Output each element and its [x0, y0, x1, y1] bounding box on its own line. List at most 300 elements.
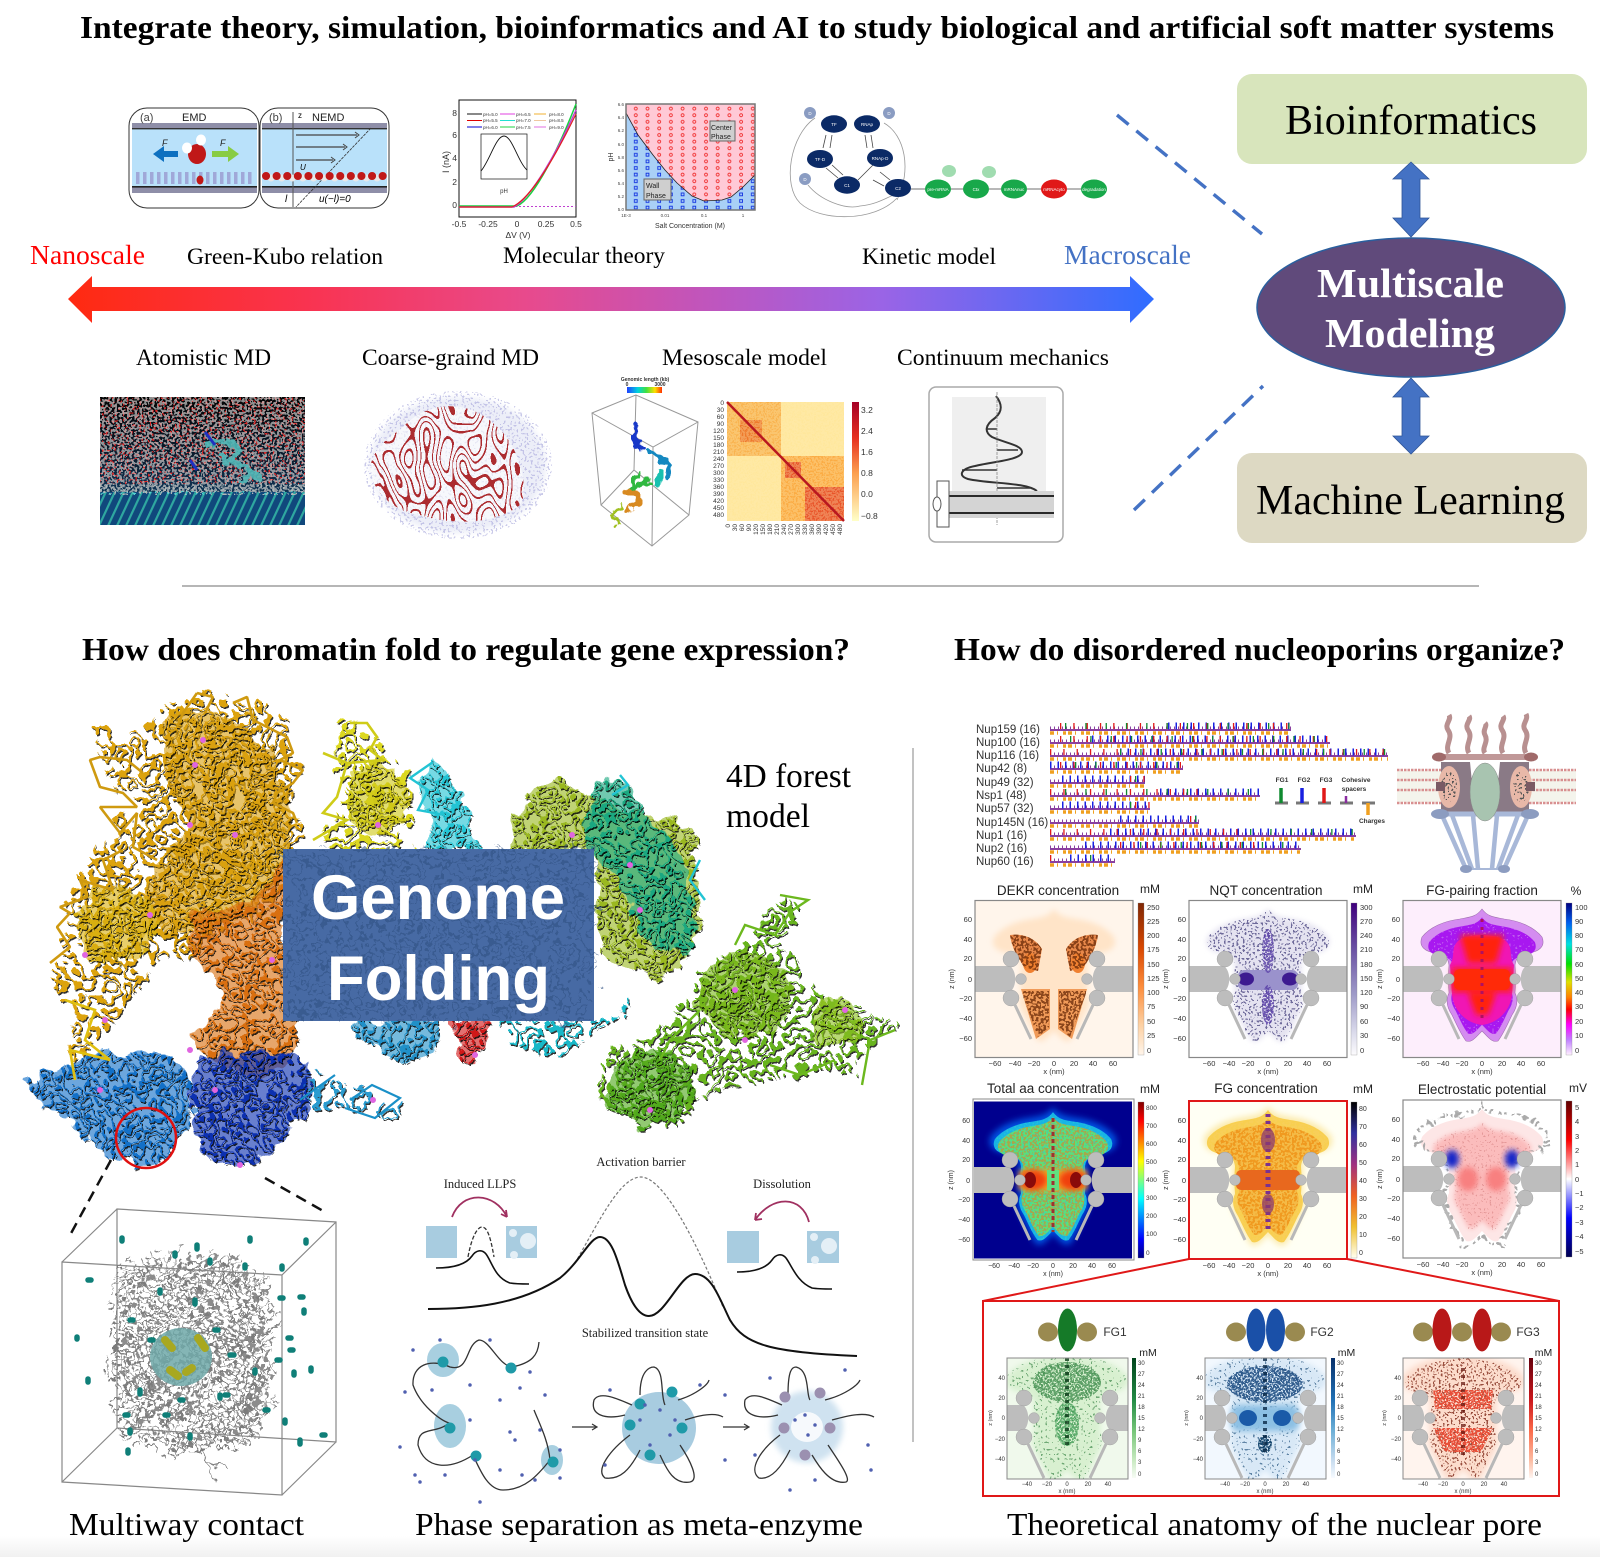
panel: FG2: 6 — [1337, 1449, 1341, 1455]
image: mesoscale polymer in box: 0 — [626, 382, 629, 388]
callout: red zoom box — [983, 1301, 1559, 1496]
chart: current versus voltage: 0 — [515, 219, 520, 229]
diagram: kinetic network: C1 — [844, 183, 850, 188]
panel: DEKR concentration: −40 — [959, 1014, 972, 1023]
panel: Electrostatic potential: −20 — [1387, 1194, 1400, 1203]
panel: FG-pairing fraction: −60 — [1417, 1059, 1429, 1068]
panel: FG concentration: 50 — [1359, 1160, 1367, 1167]
panel: FG2: FG2 — [1310, 1325, 1334, 1339]
label: Green-Kubo relation: Green-Kubo relation — [187, 244, 384, 269]
panel: FG3: 0 — [1535, 1472, 1539, 1478]
oval: Multiscale Modeling — [1257, 238, 1565, 377]
chart: energy landscape: Activation barrier — [596, 1155, 686, 1169]
panel: FG-pairing fraction: 80 — [1575, 931, 1583, 940]
chart: contact heatmap: 30 — [732, 524, 739, 531]
panel: NQT concentration: 120 — [1360, 988, 1373, 997]
chart: contact heatmap: 90 — [717, 421, 724, 428]
chart: phase diagram — [608, 102, 755, 230]
line: upper dashed connector — [1117, 115, 1262, 234]
panel: Total aa concentration: Total aa concentration — [987, 1081, 1119, 1096]
panel: Electrostatic potential: −1 — [1575, 1189, 1584, 1198]
panel: FG concentration: 20 — [1359, 1214, 1367, 1221]
panel: FG-pairing fraction: 100 — [1575, 903, 1588, 912]
panel: DEKR concentration: 60 — [964, 915, 972, 924]
panel: EMD and NEMD schematic: U — [300, 163, 306, 172]
panel: FG-pairing fraction: −20 — [1456, 1059, 1468, 1068]
chart: contact heatmap: 0.0 — [861, 489, 873, 499]
panel: Electrostatic potential: mV — [1569, 1081, 1587, 1095]
panel: FG3: 9 — [1535, 1438, 1539, 1444]
panel: FG-pairing fraction: −40 — [1437, 1059, 1449, 1068]
chart: contact heatmap: 150 — [760, 524, 767, 535]
panel: FG3 — [1382, 1308, 1552, 1495]
panel: NQT concentration: 20 — [1178, 954, 1186, 963]
panel: FG concentration: 0 — [1182, 1176, 1186, 1185]
panel: FG-pairing fraction: 40 — [1392, 935, 1400, 944]
chart: contact heatmap: 300 — [713, 470, 724, 477]
panel: Electrostatic potential: 0 — [1575, 1175, 1579, 1184]
chart: phase diagram: Wall — [646, 183, 660, 190]
panel: FG-pairing fraction: 50 — [1575, 974, 1583, 983]
panel: NQT concentration: 180 — [1360, 960, 1373, 969]
line: lower dashed connector — [1134, 386, 1263, 510]
chart: contact heatmap: 270 — [713, 463, 724, 470]
chart: contact heatmap: 0 — [720, 400, 724, 407]
panel: FG1: 27 — [1138, 1372, 1145, 1378]
panel: NQT concentration: 210 — [1360, 945, 1373, 954]
chart: contact heatmap: 330 — [713, 477, 724, 484]
panel: NQT concentration: −20 — [1242, 1059, 1254, 1068]
panel: FG concentration: 0 — [1359, 1250, 1363, 1257]
panel: Electrostatic potential: x (nm) — [1471, 1268, 1493, 1277]
chart: contact heatmap: −0.8 — [861, 511, 878, 521]
chart: current versus voltage: pH=7.0 — [516, 118, 531, 123]
panel: FG-pairing fraction: 40 — [1575, 988, 1583, 997]
arrow: scale gradient — [68, 276, 1154, 323]
panel: DEKR concentration: 20 — [964, 954, 972, 963]
chart: current versus voltage: -0.25 — [478, 219, 498, 229]
box: Machine Learning — [1237, 453, 1587, 543]
label: Mesoscale model: Mesoscale model — [662, 345, 827, 370]
panel: FG concentration: 0 — [1266, 1261, 1270, 1270]
chart: phase diagram: 5.8 — [618, 155, 624, 160]
chart: phase diagram: Phase — [646, 193, 666, 200]
panel: FG1: −40 — [1022, 1482, 1033, 1488]
panel: EMD and NEMD schematic: F — [220, 138, 226, 148]
chart: phase diagram: 5.0 — [618, 207, 624, 212]
panel: DEKR concentration: x (nm) — [1043, 1067, 1065, 1076]
panel: FG-pairing fraction: 30 — [1575, 1002, 1583, 1011]
panel: Electrostatic potential: 4 — [1575, 1117, 1579, 1126]
panel: FG1: 6 — [1138, 1449, 1142, 1455]
label: 4D forest model: 4D forest — [726, 758, 852, 795]
panel: FG1: 20 — [1085, 1482, 1092, 1488]
panel: FG concentration: FG concentration — [1214, 1081, 1318, 1096]
panel: Electrostatic potential: 20 — [1392, 1154, 1400, 1163]
panel: Total aa concentration — [948, 1081, 1160, 1278]
panel: FG2: 12 — [1337, 1427, 1344, 1433]
chart: current versus voltage: ΔV (V) — [505, 230, 531, 240]
panel: NQT concentration — [1163, 882, 1373, 1076]
panel: FG2: 20 — [1196, 1396, 1204, 1402]
panel: NQT concentration: 0 — [1182, 975, 1186, 984]
panel: FG concentration: 30 — [1359, 1196, 1367, 1203]
panel: Total aa concentration: 500 — [1146, 1159, 1157, 1166]
panel: FG1: 40 — [1105, 1482, 1112, 1488]
panel: Electrostatic potential: −5 — [1575, 1247, 1584, 1256]
chart: contact heatmap: 3.2 — [861, 405, 873, 415]
panel: Electrostatic potential: −60 — [1387, 1234, 1400, 1243]
panel: FG concentration: 60 — [1359, 1142, 1367, 1149]
panel: Total aa concentration: 100 — [1146, 1231, 1157, 1238]
chart: contact heatmap: 390 — [713, 491, 724, 498]
panel: FG-pairing fraction: −60 — [1387, 1034, 1400, 1043]
panel: FG3: FG3 — [1516, 1325, 1540, 1339]
image: continuum beam — [929, 387, 1063, 542]
panel: FG concentration: 80 — [1359, 1106, 1367, 1113]
panel: FG concentration: mM — [1353, 1082, 1373, 1096]
chart: phase diagram: 1E-3 — [621, 213, 631, 218]
chart: energy landscape: Stabilized transition state — [582, 1326, 709, 1340]
panel: Total aa concentration: mM — [1140, 1082, 1160, 1096]
panel: NQT concentration: −40 — [1173, 1014, 1186, 1023]
panel: Electrostatic potential: Electrostatic potential — [1418, 1082, 1546, 1097]
panel: FG3: z (nm) — [1382, 1410, 1388, 1426]
panel: NQT concentration: −40 — [1223, 1059, 1235, 1068]
panel: FG concentration: z (nm) — [1163, 1170, 1170, 1190]
label: Continuum mechanics: Continuum mechanics — [897, 345, 1109, 370]
panel: FG1: 12 — [1138, 1427, 1145, 1433]
panel: FG2: 20 — [1283, 1482, 1290, 1488]
chart: contact heatmap: 120 — [753, 524, 760, 535]
panel: FG-pairing fraction: 0 — [1480, 1059, 1484, 1068]
panel: FG concentration: 20 — [1178, 1155, 1186, 1164]
panel: FG-pairing fraction: z (nm) — [1377, 969, 1384, 989]
chart: current versus voltage: pH=8.0 — [549, 112, 564, 117]
panel: FG concentration: 70 — [1359, 1124, 1367, 1131]
panel: FG-pairing fraction: 90 — [1575, 917, 1583, 926]
chart: nucleoporin sequences: Cohesive — [1342, 777, 1371, 784]
panel: FG1: 0 — [1065, 1482, 1069, 1488]
panel: DEKR concentration: 50 — [1147, 1017, 1155, 1026]
chart: current versus voltage: pH=5.0 — [483, 112, 498, 117]
panel: FG-pairing fraction: % — [1571, 884, 1582, 898]
chart: current versus voltage: pH=7.5 — [516, 125, 531, 130]
panel: Total aa concentration: x (nm) — [1043, 1271, 1063, 1278]
diagram: kinetic network: D — [887, 111, 891, 116]
chart: phase diagram: 5.6 — [618, 168, 624, 173]
panel: EMD and NEMD schematic: (b) — [269, 112, 282, 124]
panel: NQT concentration: 0 — [1266, 1059, 1270, 1068]
chart: contact heatmap: 330 — [802, 524, 809, 535]
panel: FG2: −40 — [1193, 1457, 1204, 1463]
panel: FG3: −40 — [1391, 1457, 1402, 1463]
panel: FG concentration: 10 — [1359, 1232, 1367, 1239]
panel: FG-pairing fraction: x (nm) — [1471, 1067, 1493, 1076]
chart: contact heatmap: 480 — [713, 512, 724, 519]
title: Integrate theory, simulation, bioinformatics and AI to study biological and artificial soft matter systems — [80, 10, 1554, 45]
chart: contact heatmap: 240 — [713, 456, 724, 463]
panel: Total aa concentration: −20 — [1027, 1263, 1039, 1270]
panel: DEKR concentration: z (nm) — [949, 969, 956, 989]
panel: NQT concentration: mM — [1353, 882, 1373, 896]
chart: nucleoporin sequences: Nup1 (16) — [976, 830, 1027, 842]
panel: FG3: 30 — [1535, 1361, 1542, 1367]
panel: DEKR concentration: mM — [1140, 882, 1160, 896]
chart: current versus voltage: pH=6.5 — [516, 112, 531, 117]
panel: FG3: 20 — [1481, 1482, 1488, 1488]
diagram: kinetic network: mRNAcyto — [1043, 187, 1065, 192]
panel: DEKR concentration: 0 — [1147, 1046, 1151, 1055]
chart: nucleoporin sequences: Nup49 (32) — [976, 777, 1034, 789]
panel: FG-pairing fraction: −20 — [1387, 994, 1400, 1003]
chart: current versus voltage — [441, 100, 582, 240]
panel: DEKR concentration: −20 — [959, 994, 972, 1003]
panel: FG2: 27 — [1337, 1372, 1344, 1378]
panel: FG1: 18 — [1138, 1405, 1145, 1411]
chart: phase diagram: Phase — [711, 134, 731, 141]
diagram: kinetic network: TF·D — [815, 157, 826, 162]
chart: phase diagram: 1 — [742, 213, 745, 218]
panel: FG2: mM — [1338, 1347, 1355, 1359]
panel: FG2: 3 — [1337, 1460, 1341, 1466]
chart: current versus voltage: pH=9.0 — [549, 125, 564, 130]
panel: FG-pairing fraction: 60 — [1537, 1059, 1545, 1068]
panel: FG1: 40 — [998, 1376, 1006, 1382]
panel: Electrostatic potential: 2 — [1575, 1146, 1579, 1155]
panel: DEKR concentration: 75 — [1147, 1002, 1155, 1011]
panel: Electrostatic potential: −40 — [1437, 1260, 1449, 1269]
chart: contact heatmap: 90 — [746, 524, 753, 531]
panel: FG1: 0 — [1002, 1416, 1006, 1422]
panel: FG concentration: −40 — [1223, 1261, 1235, 1270]
diagram: kinetic network: C2 — [895, 186, 901, 191]
panel: DEKR concentration: 20 — [1070, 1059, 1078, 1068]
panel: FG-pairing fraction: 60 — [1575, 960, 1583, 969]
chart: nucleoporin sequences: Nsp1 (48) — [976, 790, 1027, 802]
panel: DEKR concentration: 100 — [1147, 988, 1160, 997]
panel: NQT concentration: 90 — [1360, 1002, 1368, 1011]
chart: current versus voltage: 2 — [452, 177, 457, 187]
panel: DEKR concentration: 225 — [1147, 917, 1160, 926]
chart: nucleoporin sequences: FG3 — [1320, 777, 1333, 784]
panel: FG2: −40 — [1220, 1482, 1231, 1488]
chart: contact heatmap: 30 — [717, 407, 724, 414]
callout: red circle — [116, 1108, 176, 1168]
panel: EMD and NEMD schematic: z — [298, 111, 302, 120]
panel: FG3: −40 — [1418, 1482, 1429, 1488]
panel: Electrostatic potential: 40 — [1392, 1135, 1400, 1144]
label: Multiway contact: Multiway contact — [69, 1506, 304, 1542]
panel: Total aa concentration: −60 — [958, 1237, 970, 1244]
label: Kinetic model: Kinetic model — [862, 244, 996, 269]
chart: nucleoporin sequences: spacers — [1342, 786, 1367, 793]
panel: FG1: −20 — [1042, 1482, 1053, 1488]
panel: NQT concentration: x (nm) — [1257, 1067, 1279, 1076]
panel: FG-pairing fraction: 0 — [1396, 975, 1400, 984]
panel: NQT concentration: 60 — [1323, 1059, 1331, 1068]
panel: FG2: 30 — [1337, 1361, 1344, 1367]
label: Coarse-graind MD: Coarse-graind MD — [362, 345, 539, 370]
panel: Electrostatic potential: 40 — [1517, 1260, 1525, 1269]
panel: FG3: 15 — [1535, 1416, 1542, 1422]
diagram: kinetic network: D — [803, 177, 807, 182]
box: Bioinformatics — [1237, 74, 1587, 164]
chart: phase diagram: 5.2 — [618, 194, 624, 199]
panel: FG2: 9 — [1337, 1438, 1341, 1444]
panel: FG2: −20 — [1240, 1482, 1251, 1488]
label: Macroscale: Macroscale — [1064, 240, 1191, 270]
panel: FG-pairing fraction — [1377, 883, 1588, 1076]
panel: NQT concentration: NQT concentration — [1209, 883, 1323, 898]
panel: NQT concentration: 60 — [1360, 1017, 1368, 1026]
panel: FG3: 24 — [1535, 1383, 1542, 1389]
panel: FG concentration: 40 — [1359, 1178, 1367, 1185]
panel: Electrostatic potential: z (nm) — [1377, 1169, 1384, 1189]
chart: contact heatmap: 2.4 — [861, 426, 873, 436]
panel: FG2: 0 — [1337, 1472, 1341, 1478]
panel: FG3: 3 — [1535, 1460, 1539, 1466]
panel: DEKR concentration: −60 — [959, 1034, 972, 1043]
panel: FG-pairing fraction: 20 — [1392, 954, 1400, 963]
panel: FG concentration: −20 — [1242, 1261, 1254, 1270]
panel: FG1: 24 — [1138, 1383, 1145, 1389]
image: mesoscale polymer in box — [592, 377, 698, 546]
panel: FG3: 40 — [1501, 1482, 1508, 1488]
panel: FG concentration: −60 — [1173, 1235, 1186, 1244]
panel: FG1: 20 — [998, 1396, 1006, 1402]
panel: FG3: 18 — [1535, 1405, 1542, 1411]
panel: DEKR concentration: 60 — [1109, 1059, 1117, 1068]
chart: nucleoporin sequences: FG2 — [1298, 777, 1311, 784]
illustration: nuclear pore complex — [1397, 714, 1576, 873]
arrow: top double arrow — [1393, 162, 1429, 237]
panel: NQT concentration: 0 — [1360, 1046, 1364, 1055]
chart: phase diagram: 0.1 — [701, 213, 708, 218]
panel: DEKR concentration: 0 — [1052, 1059, 1056, 1068]
panel: FG1: z (nm) — [988, 1410, 994, 1426]
diagram: kinetic network: RNAp — [861, 122, 873, 127]
chart: contact heatmap: 60 — [717, 414, 724, 421]
panel: Total aa concentration: 300 — [1146, 1195, 1157, 1202]
panel: FG3: −20 — [1438, 1482, 1449, 1488]
chart: current versus voltage: 8 — [452, 108, 457, 118]
panel: Electrostatic potential: −60 — [1417, 1260, 1429, 1269]
panel: Total aa concentration: 700 — [1146, 1123, 1157, 1130]
heading: chromatin question: How does chromatin fold to regulate gene expression? — [82, 631, 850, 667]
panel: FG1: −40 — [995, 1457, 1006, 1463]
panel: FG-pairing fraction: 20 — [1498, 1059, 1506, 1068]
panel: NQT concentration: 30 — [1360, 1031, 1368, 1040]
panel: Total aa concentration: 60 — [962, 1118, 970, 1125]
panel: FG2: 21 — [1337, 1394, 1344, 1400]
diagram: kinetic network — [790, 107, 1107, 217]
chart: phase diagram: 6.2 — [618, 128, 624, 133]
panel: EMD and NEMD schematic — [129, 108, 389, 208]
chart: current versus voltage: 4 — [452, 153, 457, 163]
panel: FG3: −20 — [1391, 1437, 1402, 1443]
panel: Total aa concentration: 600 — [1146, 1141, 1157, 1148]
chart: current versus voltage: I (nA) — [441, 151, 451, 173]
arrow: bottom double arrow — [1393, 378, 1429, 454]
chart: energy landscape: Induced LLPS — [444, 1177, 516, 1191]
label: Atomistic MD: Atomistic MD — [136, 345, 271, 370]
panel: FG concentration — [1163, 1081, 1373, 1278]
panel: Electrostatic potential: 60 — [1392, 1115, 1400, 1124]
panel: DEKR concentration: 0 — [968, 975, 972, 984]
diagram: kinetic network: pre-mRNA — [927, 187, 949, 192]
heading: nucleoporin question: How do disordered nucleoporins organize? — [954, 631, 1565, 667]
chart: phase diagram: 6.4 — [618, 115, 624, 120]
image: mesoscale polymer in box: Genomic length (kb) — [621, 377, 669, 383]
label: Theoretical anatomy of the nuclear pore: Theoretical anatomy of the nuclear pore — [1007, 1506, 1542, 1542]
chart: contact heatmap: 390 — [816, 524, 823, 535]
panel: Electrostatic potential: 5 — [1575, 1103, 1579, 1112]
chart: contact heatmap: 270 — [788, 524, 795, 535]
oval: Multiscale Modeling: Multiscale — [1317, 260, 1504, 306]
panel: FG2 — [1184, 1308, 1355, 1495]
panel: Total aa concentration: −60 — [988, 1263, 1000, 1270]
diagram: kinetic network: Ctx — [973, 187, 980, 192]
panel: Total aa concentration: 400 — [1146, 1177, 1157, 1184]
chart: contact heatmap: 210 — [774, 524, 781, 535]
chart: nucleoporin sequences — [976, 724, 1388, 868]
chart: contact heatmap: 450 — [713, 505, 724, 512]
panel: FG1: 0 — [1138, 1472, 1142, 1478]
chart: phase diagram: Salt Concentration (M) — [655, 223, 725, 230]
chart: nucleoporin sequences: Nup60 (16) — [976, 856, 1034, 868]
panel: FG3: 0 — [1398, 1416, 1402, 1422]
panel: FG1: 15 — [1138, 1416, 1145, 1422]
panel: FG2: 40 — [1303, 1482, 1310, 1488]
panel: Electrostatic potential: 60 — [1537, 1260, 1545, 1269]
panel: EMD and NEMD schematic: u(−l)=0 — [319, 194, 351, 205]
panel: NQT concentration: 270 — [1360, 917, 1373, 926]
panel: FG1: FG1 — [1103, 1325, 1127, 1339]
illustration: phase separation droplets — [400, 1340, 874, 1502]
chart: contact heatmap: 360 — [713, 484, 724, 491]
panel: NQT concentration: −60 — [1173, 1034, 1186, 1043]
chart: energy landscape — [426, 1155, 857, 1356]
chart: nucleoporin sequences: Nup42 (8) — [976, 763, 1027, 775]
panel: Electrostatic potential: 0 — [1480, 1260, 1484, 1269]
chart: contact heatmap: 420 — [823, 524, 830, 535]
panel: FG1: mM — [1139, 1347, 1157, 1359]
panel: FG2: −20 — [1193, 1437, 1204, 1443]
chart: contact heatmap: 420 — [713, 498, 724, 505]
chart: contact heatmap: 210 — [713, 449, 724, 456]
chart: current versus voltage: 0.5 — [570, 219, 582, 229]
panel: Total aa concentration: 20 — [1069, 1263, 1077, 1270]
label: 4D forest model — [726, 758, 852, 835]
panel: FG-pairing fraction: 10 — [1575, 1031, 1583, 1040]
panel: EMD and NEMD schematic: (a) — [140, 112, 153, 124]
panel: FG-pairing fraction: −40 — [1387, 1014, 1400, 1023]
panel: FG2: 0 — [1263, 1482, 1267, 1488]
chart: nucleoporin sequences: FG1 — [1276, 777, 1289, 784]
panel: FG concentration: −60 — [1203, 1261, 1215, 1270]
label: Genome Folding box: Folding — [327, 944, 550, 1014]
panel: DEKR concentration: 175 — [1147, 945, 1160, 954]
panel: FG2: z (nm) — [1184, 1410, 1190, 1426]
panel: Total aa concentration: 800 — [1146, 1105, 1157, 1112]
chart: current versus voltage: 6 — [452, 130, 457, 140]
chart: contact heatmap: 180 — [713, 442, 724, 449]
panel: DEKR concentration: 25 — [1147, 1031, 1155, 1040]
panel: Electrostatic potential: −2 — [1575, 1203, 1584, 1212]
panel: Total aa concentration: 200 — [1146, 1213, 1157, 1220]
panel: DEKR concentration: 40 — [964, 935, 972, 944]
